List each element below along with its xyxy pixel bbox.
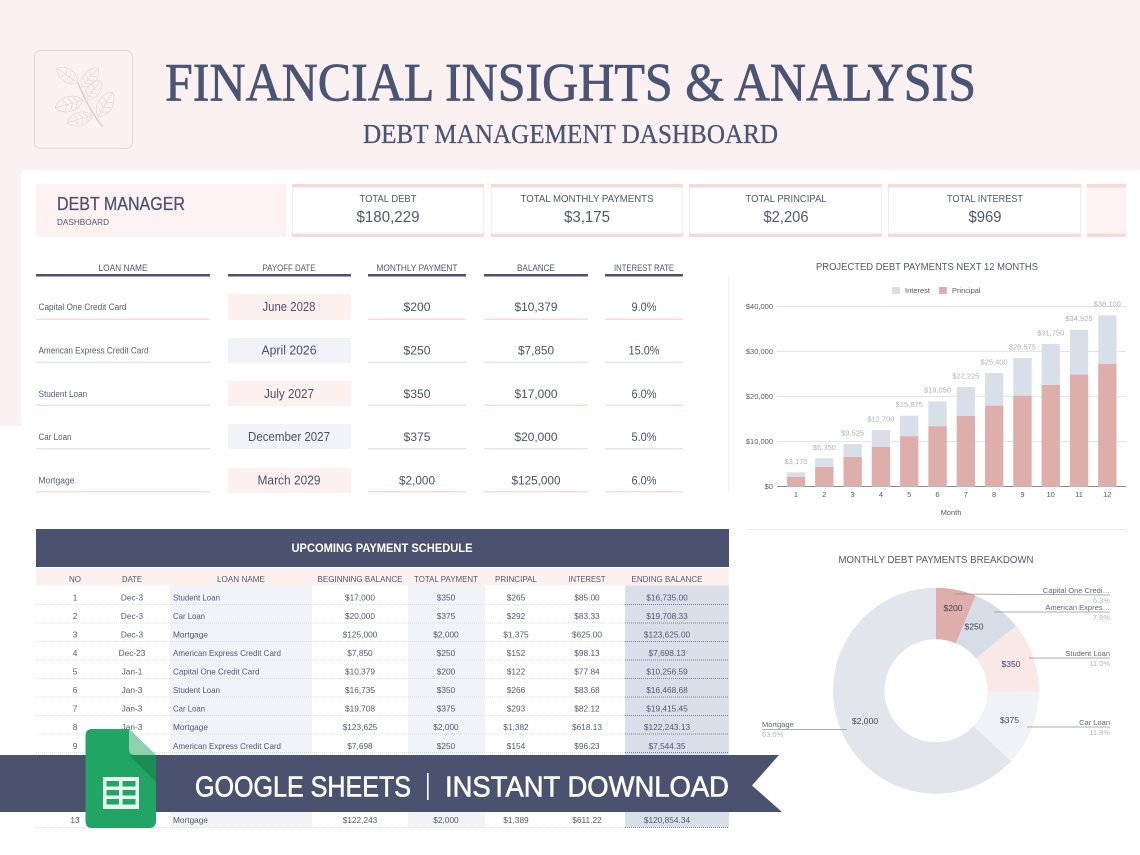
schedule row 9: 9 [73, 741, 78, 751]
panel: total debt: $180,229 [356, 209, 420, 226]
bar value labels: $31,750 [1037, 328, 1064, 338]
schedule row 7: Car Loan [173, 704, 205, 714]
schedule row 5: $10,379 [345, 666, 375, 676]
schedule row 8: $2,000 [433, 722, 459, 732]
schedule row 1: $350 [437, 592, 456, 602]
donut value labels: $375 [1000, 715, 1019, 725]
donut value labels [852, 603, 1021, 726]
schedule row 7: Jan-3 [122, 704, 143, 714]
schedule row 9: $7,544.35 [649, 741, 686, 751]
schedule row 1 [73, 592, 688, 602]
schedule row 8: $123,625 [343, 722, 378, 732]
panel: total monthly payments [491, 184, 683, 237]
schedule row 4: Dec-23 [119, 648, 146, 658]
gridlines and y axis: $20,000 [746, 392, 773, 401]
schedule row 3: $123,625.00 [644, 630, 690, 640]
schedule row 2: $375 [437, 611, 456, 621]
x axis labels: 9 [1020, 490, 1024, 499]
loan table header: INTEREST RATE [614, 263, 674, 273]
header band [0, 0, 1140, 426]
schedule row 6: Jan-3 [122, 685, 143, 695]
donut legend labels: 7.9% [1093, 613, 1110, 622]
loan row: Capital One: June 2028 [262, 300, 316, 314]
schedule row 4 [73, 648, 686, 658]
schedule row 3: $625.00 [572, 630, 602, 640]
panel: total monthly payments: $3,175 [564, 209, 610, 226]
x axis labels: 12 [1103, 490, 1111, 499]
loan row: American Express: American Express Credit Card [38, 346, 149, 356]
x axis labels: 5 [907, 490, 911, 499]
x axis labels: 7 [964, 490, 968, 499]
schedule row 6 [73, 685, 688, 695]
schedule row 5: 5 [73, 666, 78, 676]
loan table header: MONTHLY PAYMENT [376, 263, 458, 273]
schedule row 7: $19,708 [345, 704, 375, 714]
schedule row 8: Mortgage [173, 722, 208, 732]
loan row: Car Loan: December 2027 [248, 430, 330, 444]
schedule row 3: $2,000 [433, 630, 459, 640]
loan row: American Express: 15.0% [628, 344, 660, 358]
schedule row 4: $7,850 [347, 648, 373, 658]
schedule row 4: $250 [437, 648, 456, 658]
panel: total interest: $969 [968, 209, 1002, 226]
schedule row 4: American Express Credit Card [173, 648, 281, 658]
schedule row 6: $350 [437, 685, 456, 695]
schedule row 2: 2 [73, 611, 78, 621]
schedule column header: DATE [122, 574, 142, 584]
schedule row 13: $120,854.34 [644, 815, 690, 825]
panel: total principal: $2,206 [764, 209, 809, 226]
schedule row 6: $266 [507, 685, 526, 695]
x axis labels: 4 [879, 490, 883, 499]
donut legend labels: 6.3% [1093, 596, 1110, 605]
loan row: Capital One: $200 [404, 300, 431, 314]
schedule row 5: $77.84 [574, 666, 600, 676]
schedule column header [36, 568, 729, 586]
donut legend labels: 63.0% [762, 730, 784, 739]
legend: Principal [952, 286, 981, 295]
banner ribbon [0, 755, 782, 812]
panel: total debt [292, 184, 484, 237]
schedule row 13: $2,000 [433, 815, 459, 825]
loan row: Mortgage: $125,000 [512, 474, 561, 488]
loan row: Mortgage [36, 468, 683, 493]
x axis labels: Month [941, 508, 961, 517]
schedule row 1: Dec-3 [121, 592, 143, 602]
schedule row 9 [73, 741, 686, 751]
loan row: American Express: April 2026 [262, 344, 317, 358]
schedule row 2: $83.33 [574, 611, 600, 621]
panel: total principal: TOTAL PRINCIPAL [746, 193, 827, 205]
schedule row 13: $611.22 [572, 815, 602, 825]
schedule row 5: $200 [437, 666, 456, 676]
loan row: Capital One: $10,379 [514, 300, 558, 314]
loan table header: LOAN NAME [98, 263, 148, 273]
loan row: Student Loan: $17,000 [514, 387, 558, 401]
schedule column header: INTEREST [568, 574, 606, 584]
schedule row 8: 8 [73, 722, 78, 732]
schedule row 7 [73, 704, 688, 714]
schedule row 1: $85.00 [574, 592, 600, 602]
panel: debt manager heading: DASHBOARD [57, 217, 109, 227]
bar value labels: $34,925 [1065, 314, 1093, 323]
icon: leaf logo [34, 50, 132, 148]
loan row: Car Loan: Car Loan [38, 432, 72, 442]
schedule row 8: $1,382 [503, 722, 529, 732]
loan row: Capital One: Capital One Credit Card [38, 302, 127, 312]
panel: upcoming payment schedule [36, 529, 729, 828]
gridlines and y axis: $40,000 [746, 302, 773, 311]
bar value labels: $3,175 [785, 457, 807, 466]
schedule row 1: $17,000 [345, 592, 375, 602]
schedule row 7: $82.12 [574, 704, 600, 714]
schedule row 13: $122,243 [343, 815, 378, 825]
donut value labels: $350 [1001, 659, 1021, 669]
loan row: Capital One: 9.0% [632, 300, 657, 314]
schedule row 13: Mortgage [173, 815, 208, 825]
schedule column header: LOAN NAME [217, 574, 265, 584]
schedule row 3: $125,000 [343, 630, 378, 640]
donut legend labels: Student Loan [1065, 649, 1110, 658]
bar value labels: $22,225 [952, 372, 979, 380]
schedule row 2: $292 [507, 611, 526, 621]
loan row: Capital One [36, 294, 683, 320]
loan row: Car Loan: $375 [404, 430, 431, 444]
schedule row 2: Dec-3 [121, 611, 143, 621]
x axis labels [794, 490, 1111, 517]
donut legend labels: Capital One Credi… [1043, 586, 1110, 595]
donut legend labels: American Expres… [1045, 603, 1110, 612]
schedule row 13: $1,389 [503, 815, 529, 825]
panel: empty card [1087, 184, 1126, 237]
panel: debt manager heading: DEBT MANAGER [57, 193, 185, 214]
schedule row 5: $10,256.59 [646, 666, 688, 676]
schedule row 1: Student Loan [173, 592, 220, 602]
schedule row 4: 4 [73, 648, 78, 658]
x axis labels: 8 [992, 490, 996, 499]
loan row: American Express [36, 338, 683, 363]
loan row: Mortgage: 6.0% [632, 474, 657, 488]
x axis labels: 3 [851, 490, 855, 499]
loan row: Student Loan: July 2027 [264, 387, 314, 401]
schedule row 7: 7 [73, 704, 78, 714]
schedule row 6: Student Loan [173, 685, 220, 695]
bar value labels: $12,700 [867, 414, 894, 424]
gridlines and y axis: $0 [765, 482, 773, 491]
donut legend labels: 11.0% [1089, 659, 1110, 668]
gridlines and y axis: $10,000 [746, 437, 773, 446]
donut legend labels: 11.8% [1089, 728, 1110, 737]
schedule row 4: $98.13 [574, 648, 600, 658]
schedule row 9: $250 [437, 741, 456, 751]
loan row: Mortgage: Mortgage [38, 476, 75, 486]
schedule row 13 [70, 815, 690, 825]
schedule row 4: $152 [507, 648, 526, 658]
loan row: American Express: $250 [404, 344, 431, 358]
schedule row 2: Car Loan [173, 611, 205, 621]
bar value labels: $15,875 [896, 400, 923, 409]
schedule title bar [36, 529, 729, 567]
gridlines and y axis: $30,000 [746, 347, 773, 356]
bar value labels: $6,350 [813, 443, 836, 452]
loan row: Car Loan [36, 424, 683, 450]
x axis labels: 11 [1075, 490, 1083, 499]
legend [892, 286, 981, 295]
loan row: American Express: $7,850 [518, 344, 554, 358]
principal bars [787, 364, 1116, 487]
bar value labels: $25,400 [981, 358, 1008, 366]
panel: total monthly payments: TOTAL MONTHLY PAYMENTS [520, 193, 654, 205]
banner ribbon: INSTANT DOWNLOAD [445, 772, 729, 804]
schedule row 8 [73, 722, 690, 732]
schedule title bar: UPCOMING PAYMENT SCHEDULE [292, 543, 473, 555]
panel: debt manager heading [36, 184, 286, 237]
loan table header: BALANCE [517, 263, 555, 273]
interest bars [787, 315, 1116, 487]
donut legend labels: Mortgage [762, 720, 794, 729]
panel: total debt: TOTAL DEBT [360, 193, 417, 205]
schedule row 1: $16,735.00 [646, 592, 688, 602]
schedule column shading [170, 586, 729, 828]
legend: Interest [905, 286, 931, 295]
schedule column header: PRINCIPAL [495, 574, 537, 584]
x axis labels: 1 [794, 490, 798, 499]
schedule row 5: $122 [507, 666, 526, 676]
schedule row 2: $19,708.33 [646, 611, 688, 621]
x axis labels: 6 [935, 490, 940, 499]
bar value labels: $19,050 [924, 386, 951, 394]
loan row: Mortgage: $2,000 [399, 474, 435, 488]
bar value labels: $28,575 [1009, 342, 1036, 352]
loan row: Student Loan: $350 [404, 387, 431, 401]
loan table header: PAYOFF DATE [262, 263, 316, 273]
donut value labels: $200 [943, 603, 963, 613]
schedule row 5: Capital One Credit Card [173, 666, 260, 676]
loan row: Student Loan [36, 381, 683, 406]
schedule row 3: $1,375 [503, 630, 529, 640]
loan row: Student Loan: 6.0% [632, 387, 657, 401]
schedule row 5 [73, 666, 688, 676]
panel: total interest [888, 184, 1081, 237]
donut value labels: $2,000 [852, 716, 878, 726]
schedule row 3: Mortgage [173, 630, 208, 640]
schedule row 6: 6 [73, 685, 78, 695]
schedule column header: TOTAL PAYMENT [414, 574, 479, 584]
schedule column header: ENDING BALANCE [632, 574, 703, 584]
donut value labels: $250 [964, 622, 984, 632]
loan row: Car Loan: 5.0% [632, 430, 657, 444]
schedule row 1: $265 [507, 592, 526, 602]
schedule row 9: $96.23 [574, 741, 600, 751]
loan table header [36, 263, 683, 276]
schedule row separators [36, 604, 729, 828]
gridlines and y axis [746, 302, 1126, 491]
schedule column header: NO [69, 574, 81, 584]
schedule row 6: $16,735 [345, 685, 375, 695]
schedule row 7: $375 [437, 704, 456, 714]
donut legend labels: Car Loan [1079, 718, 1110, 727]
schedule row 8: Jan-3 [122, 722, 143, 732]
title: FINANCIAL INSIGHTS & ANALYSIS [165, 52, 976, 112]
schedule row 5: Jan-1 [122, 666, 143, 676]
donut leader lines [762, 594, 1110, 730]
schedule row 6: $83.68 [574, 685, 600, 695]
donut title: MONTHLY DEBT PAYMENTS BREAKDOWN [838, 554, 1034, 566]
chart title: PROJECTED DEBT PAYMENTS NEXT 12 MONTHS [816, 261, 1038, 273]
schedule row 8: $122,243.13 [644, 722, 690, 732]
schedule row 9: $154 [507, 741, 526, 751]
schedule column header: BEGINNING BALANCE [318, 574, 403, 584]
subtitle: DEBT MANAGEMENT DASHBOARD [363, 119, 778, 149]
bar value labels: $9,525 [841, 428, 864, 438]
schedule row 9: American Express Credit Card [173, 741, 281, 751]
schedule row 7: $19,415.45 [646, 704, 688, 714]
loan row: Car Loan: $20,000 [514, 430, 558, 444]
x axis labels: 10 [1047, 490, 1055, 499]
loan row: Student Loan: Student Loan [38, 389, 87, 399]
schedule row 13: 13 [70, 815, 80, 825]
donut slices [833, 588, 1039, 794]
schedule row 1: 1 [73, 592, 78, 602]
schedule row 3: 3 [73, 630, 78, 640]
loan row: Mortgage: March 2029 [258, 474, 321, 488]
icon: google sheets [86, 729, 156, 828]
schedule row 7: $293 [507, 704, 526, 714]
schedule row 8: $618.13 [572, 722, 602, 732]
banner ribbon: GOOGLE SHEETS [195, 772, 411, 804]
schedule row 2: $20,000 [345, 611, 375, 621]
chart: monthly debt payments donut [762, 554, 1110, 794]
x axis labels: 2 [822, 490, 826, 499]
schedule row 9: $7,698 [347, 741, 373, 751]
donut legend labels [762, 586, 1110, 739]
schedule row 3: Dec-3 [121, 630, 143, 640]
bar value labels: $38,100 [1094, 300, 1121, 308]
panel: total interest: TOTAL INTEREST [947, 193, 1024, 205]
schedule row 3 [73, 630, 690, 640]
schedule row 2 [73, 611, 688, 621]
chart: projected debt payments [746, 261, 1126, 517]
schedule row 6: $16,468.68 [646, 685, 688, 695]
panel: total principal [689, 184, 882, 237]
bar value labels [785, 300, 1121, 466]
schedule row 4: $7,698.13 [649, 648, 686, 658]
